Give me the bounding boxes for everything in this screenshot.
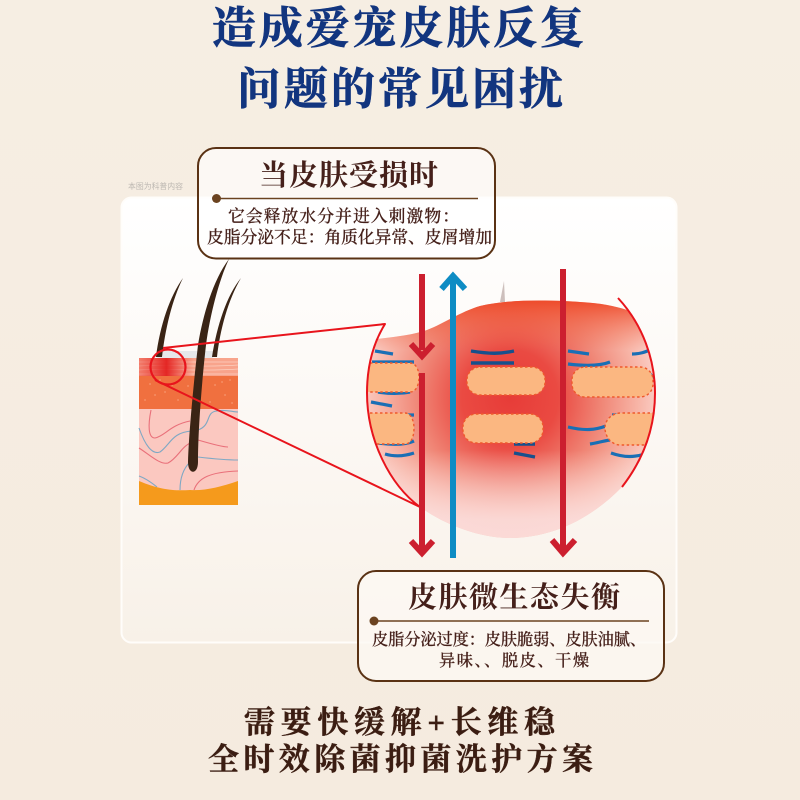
closing statement: 全时效除菌抑菌洗护方案 xyxy=(208,742,593,777)
arrow: left red down, lower xyxy=(411,373,433,553)
callout: skin microbiome imbalance xyxy=(358,571,664,681)
panel: diagram card xyxy=(122,198,676,642)
blue lipid lines xyxy=(371,350,654,456)
sebum pills xyxy=(360,363,660,445)
closing statement: 需要快缓解+长维稳 xyxy=(244,705,557,740)
callout: when skin is damaged: 当皮肤受损时 xyxy=(259,159,438,192)
title: 造成爱宠皮肤反复 xyxy=(212,4,584,53)
grey hair stub xyxy=(500,281,505,302)
note: popular science disclaimer: 本图为科普内容 xyxy=(128,181,183,191)
callout: when skin is damaged xyxy=(198,148,495,258)
callout: skin microbiome imbalance: 异味、、脱皮、干燥 xyxy=(439,652,589,670)
arrow: left red down, upper xyxy=(411,274,433,356)
arrow: right red down xyxy=(552,269,575,553)
callout: when skin is damaged: 皮脂分泌不足：角质化异常、皮屑增加 xyxy=(207,228,492,247)
title: 问题的常见困扰 xyxy=(237,65,563,114)
dermis vessels xyxy=(139,410,238,490)
callout: skin microbiome imbalance: 皮肤微生态失衡 xyxy=(408,581,620,614)
title xyxy=(212,4,584,114)
magnifier outline xyxy=(150,298,655,507)
arrow: blue up xyxy=(442,276,465,558)
illustration: magnified skin view xyxy=(150,281,660,540)
callout: skin microbiome imbalance: 皮脂分泌过度：皮肤脆弱、皮肤油腻、 xyxy=(372,630,646,649)
illustration: skin cross-section with hair xyxy=(139,259,241,505)
callout: when skin is damaged: 它会释放水分并进入刺激物： xyxy=(228,207,459,226)
closing statement xyxy=(208,705,593,777)
hairs xyxy=(156,278,183,357)
